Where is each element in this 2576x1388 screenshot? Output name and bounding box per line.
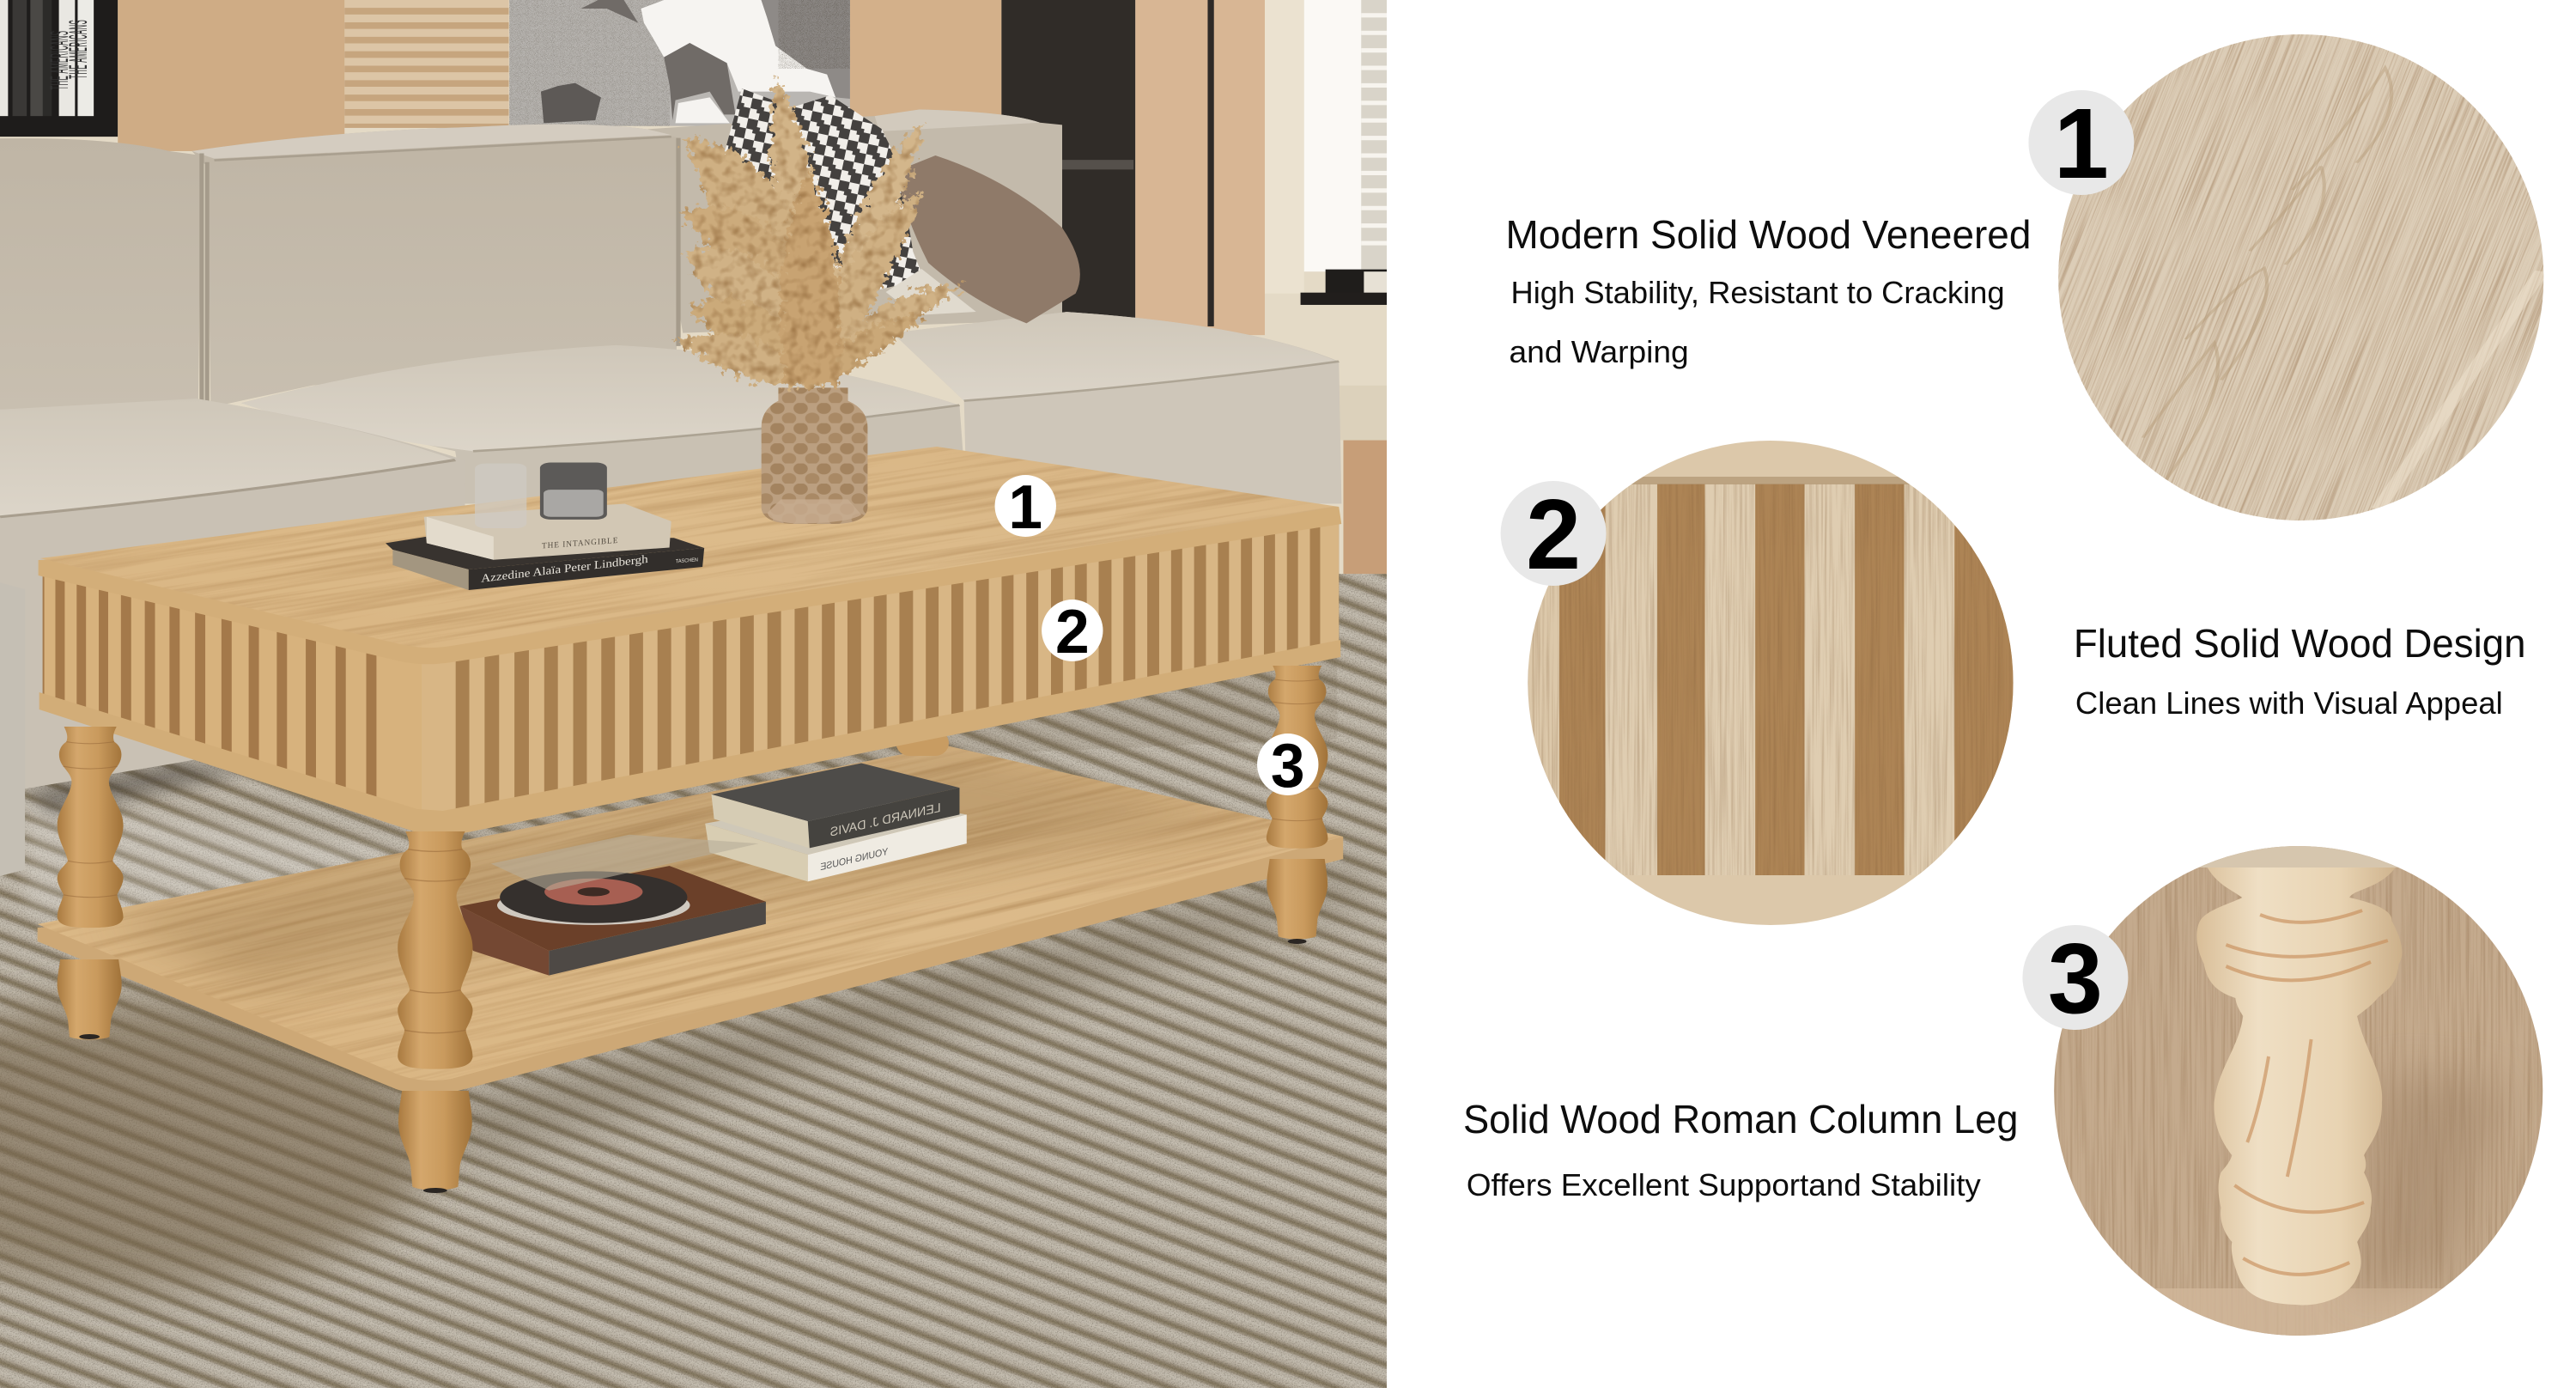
marker 1 on table: 1 [1008,473,1042,542]
pampas grass [676,77,963,389]
fluted panels [43,515,1340,859]
badge 3 [2022,923,2128,1034]
books on table [386,387,867,590]
left back cushion [0,138,202,410]
callout 3: roman column leg [1463,842,2549,1340]
bookshelf: THE AMERICANS [63,20,93,79]
circle: turned leg [2051,842,2549,1340]
dark book: TASCHEN [676,557,698,564]
brown pillow [897,155,1080,323]
shelf books [705,763,967,881]
back leg stub [896,730,949,756]
carcass bottom band [39,640,1340,836]
marker 2 on fluting: 2 [1055,598,1090,667]
dark book [386,537,704,590]
marker 3 on leg [1257,732,1318,801]
candle [540,463,607,520]
white book: YOUNG HOUSE [820,847,888,873]
right back cushion [647,110,1062,333]
middle back cushion [191,125,678,407]
table feet [58,859,1327,1193]
record player [459,835,766,976]
ribbed panel [344,0,509,128]
circle: fluted slats [1523,438,2017,928]
callout 1: veneer [1506,31,2549,525]
dark book [711,763,959,848]
wood door [1135,0,1265,335]
badge 2: 2 [1526,479,1581,590]
badge 1 [2028,88,2134,199]
right seat cushion [893,312,1341,503]
heading 2: Fluted Solid Wood Design [2074,622,2525,666]
bookshelf: THE AMERICANS [45,30,74,90]
column [2196,868,2402,1305]
marker 3 on leg: 3 [1271,732,1305,801]
dark book: LENNARD J. DAVIS [830,801,941,840]
sofa [0,110,1341,876]
heading 3: Solid Wood Roman Column Leg [1463,1098,2018,1141]
description 1: High Stability, Resistant to Cracking [1510,276,2005,310]
callout 2: fluting [1501,438,2525,928]
description 3: Offers Excellent Supportand Stability [1467,1168,1981,1202]
left seat cushion [0,399,469,788]
lower shelf [0,539,1412,1350]
description 1: and Warping [1510,335,1689,369]
middle seat cushion [241,345,967,503]
carpet [0,550,1397,1388]
cream book [424,503,671,560]
badge 2 [1501,479,1607,590]
panel: feature callouts [1463,31,2549,1340]
cream book: THE INTANGIBLE [542,537,618,551]
marker 1 on table [995,473,1056,542]
badge 3: 3 [2048,923,2103,1034]
houndstooth pillow [707,88,976,315]
marker 2 on fluting [1042,598,1103,667]
dark cabinet [1001,0,1135,320]
wall art [509,0,850,126]
badge 1: 1 [2054,88,2109,199]
table top [0,164,1439,935]
white book [705,796,967,881]
left ottoman [0,582,25,876]
panel: room photo [0,0,1439,1388]
glass [475,464,526,528]
heading 1: Modern Solid Wood Veneered [1506,213,2031,257]
description 2: Clean Lines with Visual Appeal [2075,686,2503,721]
bookshelf [0,0,118,137]
table legs [58,666,1327,1069]
wood wall panels [118,0,1001,151]
vase [762,387,867,524]
table underside shadow [409,644,1337,893]
circle: oak veneer [2056,31,2549,525]
window [1265,0,1387,305]
dark book: Azzedine Alaïa Peter Lindbergh [481,552,648,585]
description 1 [1510,276,2005,369]
back wall [0,0,1401,574]
